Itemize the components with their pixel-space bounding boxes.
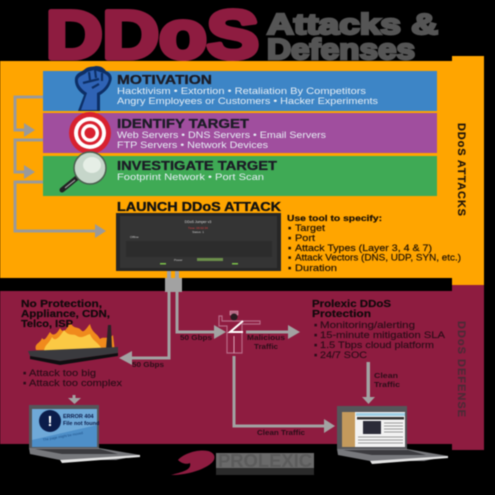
text: tool options: Target [295,223,325,234]
label: clean traffic right [374,371,400,389]
text: tool options: Attack Vectors (DNS, UDP, SYN, etc.) [295,252,461,264]
band: investigate target [43,152,437,196]
label: clean traffic right: Traffic [374,380,400,389]
text: tool options: ▪ [288,243,291,254]
label: malicious traffic: Traffic [254,342,278,351]
text: no protection heading [21,299,110,330]
screenshot: attack tool: Status: 1 [192,230,204,234]
text: tool options: ▪ [288,233,291,244]
text: prolexic protection: Monitoring/alerting [320,320,415,331]
text: no protection reasons [23,368,122,389]
title [46,0,438,73]
text: tool options: Attack Types (Layer 3, 4 & 7) [295,243,432,254]
arrow: identify to investigate [15,140,43,179]
heading: motivation: MOTIVATION [117,72,212,87]
text: tool options: ▪ [288,223,291,234]
text: no protection reasons: Attack too big [29,368,96,379]
band: identify target [43,112,437,154]
label: malicious traffic: Malicious [247,333,285,342]
screenshot: attack tool [116,213,281,271]
icon: laptop with error [29,405,140,463]
arrow: down to error laptop [68,395,81,404]
text: tool options: Port [295,233,315,244]
icon: laptop with error: File not found [63,421,99,427]
icon: burning router [28,322,118,365]
text: no protection reasons: ▪ [23,378,26,389]
label: 50 Gbps middle: 50 Gbps [180,333,212,342]
text: motivation list [117,86,378,107]
logo: Prolexic [171,451,314,475]
text: prolexic protection [312,299,446,361]
text: motivation list: Angry Employees or Customers • Hacker Experiments [117,96,378,107]
text: tool options: Duration [295,263,337,274]
icon: traffic officer [219,311,260,353]
heading: identify target: IDENTIFY TARGET [117,116,249,131]
icon: raised fist [75,66,112,111]
icon: magnifying glass [62,152,106,190]
arrow: clean traffic down [362,362,375,404]
text: no protection reasons: Attack too complex [29,378,122,389]
text: tool options: ▪ [288,252,291,264]
text: prolexic protection: ▪ [314,350,317,361]
text: no protection heading: Telco, ISP [21,319,73,330]
text: investigate target list: Footprint Network • Port Scan [117,172,264,183]
text: prolexic protection: 1.5 Tbps cloud platform [320,340,434,351]
icon: laptop with website [337,406,448,464]
arrow: malicious traffic [246,325,300,339]
text: identify target list: FTP Servers • Network Devices [117,140,268,151]
arrow: clean traffic to server [234,356,335,433]
screenshot: attack tool: DDoS Jumper v3 [185,220,211,224]
text: prolexic protection: Prolexic DDoS [312,299,391,310]
panel: DDoS attacks [0,56,484,285]
arrow: investigate to launch [15,182,106,238]
screenshot: attack tool: Time: 00:02:34 [188,226,208,230]
label: clean traffic bottom: Clean Traffic [257,428,305,437]
label: clean traffic right: Clean [374,371,398,380]
label: DDoS attacks: DDoS ATTACKS [455,123,467,216]
text: prolexic protection: ▪ [314,330,317,341]
text: prolexic protection: 15-minute mitigation SLA [320,330,446,341]
screenshot: attack tool: Offline [130,235,139,239]
text: no protection heading: No Protection, [21,299,102,310]
arrow: 50 Gbps to scrubbing [177,291,226,339]
icon: laptop with error: The page might be moved [42,431,83,442]
icon: laptop with error: ERROR 404 [63,414,95,420]
label: malicious traffic [247,333,285,351]
text: identify target list [117,130,326,151]
text: prolexic protection: 24/7 SOC [320,350,367,361]
icon: bullseye target [69,112,111,154]
text: no protection heading: Appliance, CDN, [21,309,110,320]
heading: launch attack: LAUNCH DDoS ATTACK [117,199,282,214]
text: prolexic protection: ▪ [314,340,317,351]
icon: laptop with error: ! [48,413,52,430]
panel: DDoS defense [0,285,484,450]
text: motivation list: Hacktivism • Extortion • Retaliation By Competitors [117,86,366,97]
text: tool options: ▪ [288,263,291,274]
text: tool options [287,213,461,274]
title: Attacks & [267,9,438,41]
text: identify target list: Web Servers • DNS Servers • Email Servers [117,130,326,141]
text: no protection reasons: ▪ [23,368,26,379]
arrow: 50 Gbps to unprotected network [119,291,169,365]
screenshot: attack tool: Power [174,258,183,262]
title: Defenses [267,34,415,66]
heading: investigate target: INVESTIGATE TARGET [117,158,277,173]
band: motivation [43,66,437,111]
text: tool options: Use tool to specify: [287,213,382,223]
text: prolexic protection: Protection [312,309,371,320]
icon: plug [165,271,182,292]
arrow: motivation to identify [15,97,43,137]
text: prolexic protection: ▪ [314,320,317,331]
label: 50 Gbps left: 50 Gbps [132,360,164,369]
logo: Prolexic: PROLEXIC [218,451,312,471]
label: DDoS defense: DDoS DEFENSE [455,321,467,417]
